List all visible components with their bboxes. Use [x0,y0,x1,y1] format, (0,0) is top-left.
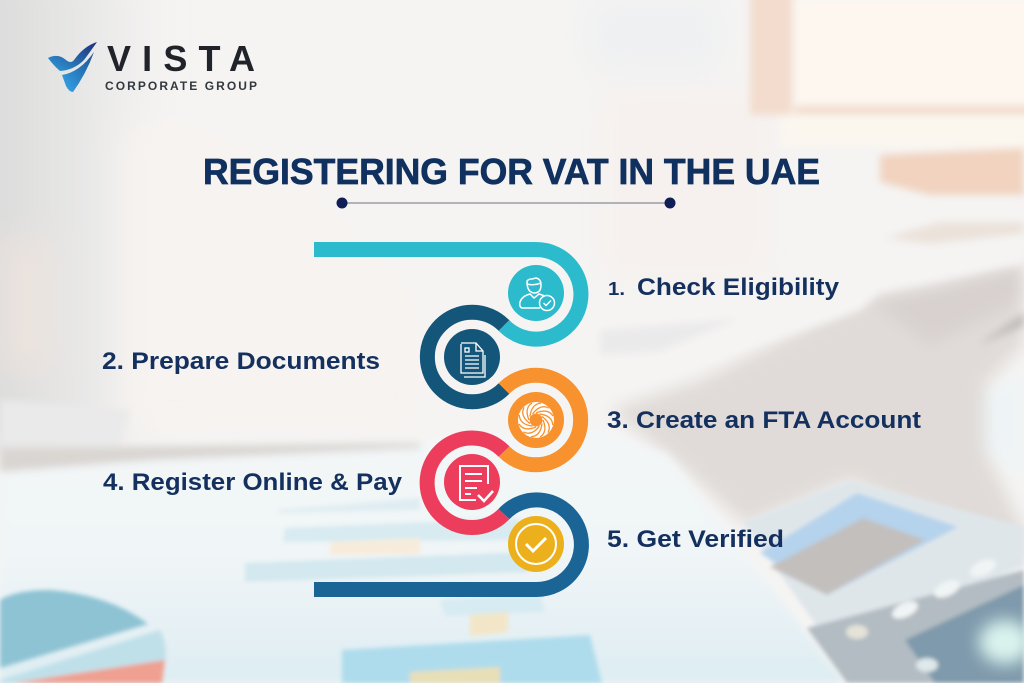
step 3 label: 3. Create an FTA Account [607,407,921,434]
step 5 label: 5. Get Verified [607,526,784,553]
icon: aperture [508,392,564,448]
step 3 connector: orange [504,375,581,465]
logo wordmark: VISTA [107,38,255,79]
paper with charts [0,400,845,683]
step 2 label: 2. Prepare Documents [102,348,380,375]
device bottom right [743,480,1024,683]
icon: form with check [444,454,500,510]
title divider [336,198,676,208]
icon: documents [444,329,500,385]
icon: person with check [508,265,564,321]
logo tagline: CORPORATE GROUP [105,79,257,93]
step 1 label: Check Eligibility [637,274,840,301]
step 5 connector: blue [314,500,581,590]
step 1 connector: teal [314,249,581,339]
step 4 connector: red [427,438,504,528]
step 4 label: 4. Register Online & Pay [103,469,403,496]
logo mark [48,42,97,92]
calculator and desk [610,262,1024,560]
icon: check badge [508,516,564,572]
step 1 label: 1. [608,279,625,299]
step 2 connector: dark blue [427,312,504,402]
logo: Vista Corporate Group [48,38,257,93]
title: REGISTERING FOR VAT IN THE UAE [203,151,820,192]
